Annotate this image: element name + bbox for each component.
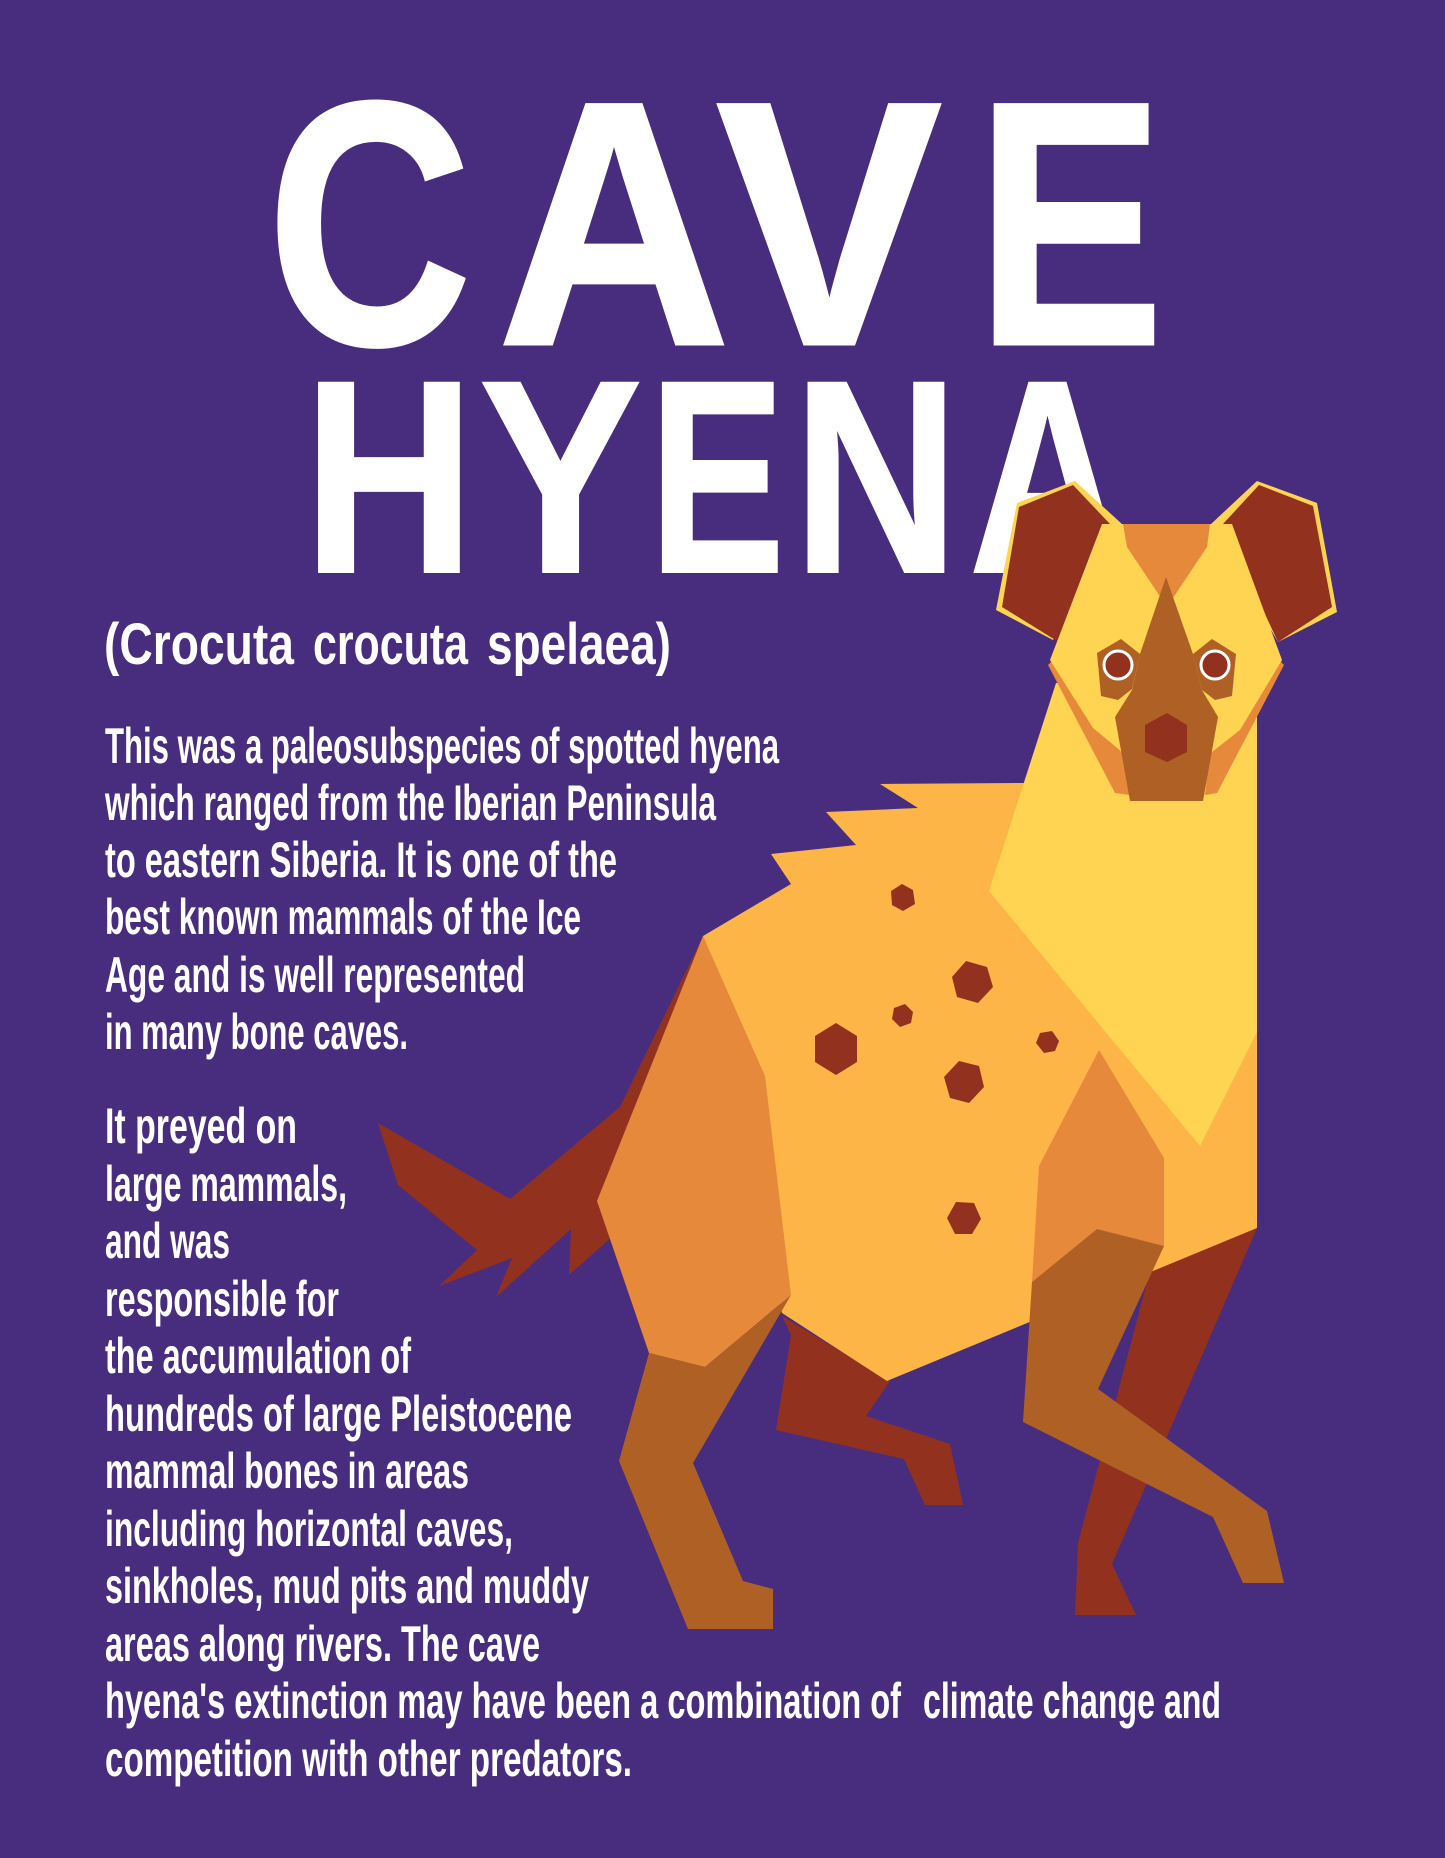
far hind leg — [776, 1316, 963, 1505]
title: CAVE: C — [267, 29, 472, 418]
text block: second paragraph: responsible for — [105, 1271, 339, 1327]
scientific name: (Crocuta — [104, 612, 295, 677]
body — [703, 783, 1257, 1381]
hyena illustration — [378, 481, 1337, 1629]
text block: second paragraph: hyena's extinction may have been a combination of — [105, 1673, 901, 1729]
title: HYENA: A — [969, 324, 1126, 631]
front thigh — [1032, 1050, 1164, 1282]
text block: first paragraph: in many bone caves. — [105, 1004, 408, 1060]
text block: second paragraph: large mammals, — [105, 1156, 347, 1212]
left ear — [996, 481, 1123, 641]
neck — [989, 683, 1257, 1146]
text block: second paragraph: and was — [105, 1213, 230, 1269]
title: HYENA: Y — [479, 324, 642, 631]
eye left — [1104, 651, 1132, 679]
text block: second paragraph: competition with other predators. — [105, 1731, 632, 1787]
text block: first paragraph: best known mammals of the Ice — [105, 889, 581, 945]
text block: second paragraph: the accumulation of — [105, 1328, 411, 1384]
nose — [1145, 713, 1187, 762]
text block: second paragraph — [105, 1098, 1221, 1787]
text block: second paragraph: sinkholes, mud pits and muddy — [105, 1558, 589, 1614]
text block: first paragraph: This was a paleosubspecies of spotted hyena — [105, 718, 780, 774]
title: HYENA: E — [649, 324, 785, 631]
text block: first paragraph: Age and is well represented — [105, 947, 525, 1003]
title: HYENA: N — [793, 324, 959, 631]
forehead — [1123, 524, 1210, 607]
scientific name: crocuta — [313, 612, 469, 677]
scientific name: spelaea) — [487, 612, 671, 677]
muzzle — [1115, 577, 1218, 801]
title: CAVE: V — [716, 29, 944, 418]
text block: second paragraph: areas along rivers. The cave — [105, 1616, 540, 1672]
head — [1048, 524, 1284, 801]
title: CAVE — [267, 29, 1164, 418]
eye right — [1201, 651, 1229, 679]
text block: first paragraph — [104, 718, 780, 1060]
text block: first paragraph: which ranged from the Iberian Peninsula — [104, 775, 717, 831]
rear thigh — [597, 936, 791, 1367]
eye patch right — [1193, 639, 1236, 700]
front lower leg — [1023, 1229, 1284, 1583]
text block: second paragraph: mammal bones in areas — [105, 1443, 469, 1499]
scientific name — [104, 612, 671, 677]
title: CAVE: A — [497, 29, 731, 418]
text block: second paragraph: including horizontal caves, — [105, 1501, 513, 1557]
text block: second paragraph: climate change and — [923, 1673, 1221, 1729]
text block: second paragraph: hundreds of large Pleistocene — [105, 1386, 572, 1442]
right ear — [1210, 481, 1337, 642]
text block: first paragraph: to eastern Siberia. It is one of the — [105, 832, 617, 888]
rear lower leg — [619, 1295, 791, 1629]
eye patch left — [1097, 639, 1140, 700]
far front leg — [1075, 1228, 1257, 1615]
face — [1050, 524, 1282, 783]
cheek left — [1048, 660, 1130, 795]
title: HYENA — [303, 324, 1126, 631]
title: HYENA: H — [303, 324, 475, 631]
text block: second paragraph: It preyed on — [105, 1098, 297, 1154]
spots — [815, 884, 1059, 1234]
cheek right — [1205, 660, 1284, 795]
tail — [378, 936, 703, 1297]
title: CAVE: E — [976, 29, 1164, 418]
